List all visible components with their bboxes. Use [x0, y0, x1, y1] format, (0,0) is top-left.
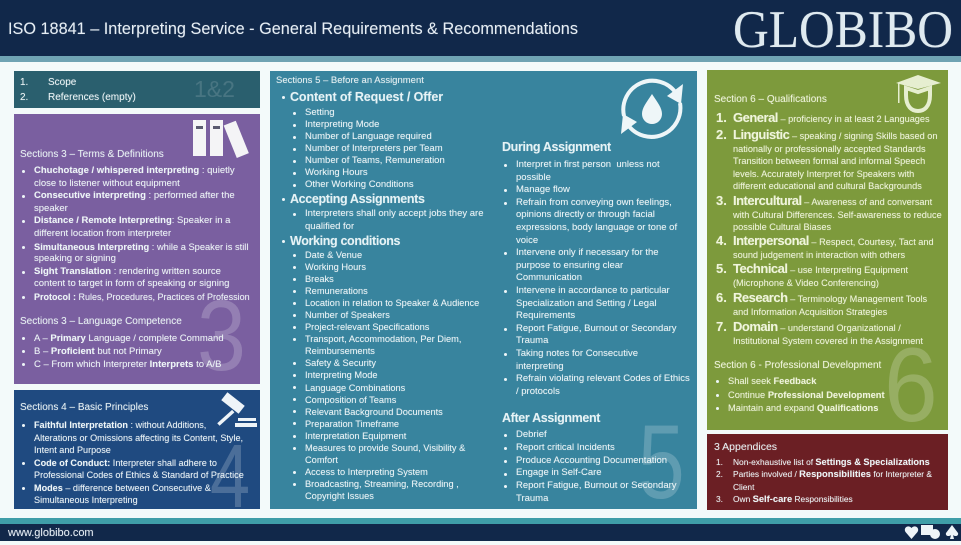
qualifications list: Research – Terminology Management Tools: [733, 290, 927, 305]
during list: interpreting: [516, 360, 564, 372]
appendices list: [716, 457, 932, 504]
panel: appendices: 1.: [716, 457, 723, 467]
panel: appendices: 3.: [716, 494, 723, 504]
during list: Interpret in first person unless not: [516, 159, 660, 170]
language list: [22, 333, 224, 370]
footer bar: [0, 518, 961, 524]
qualifications list: with Cultural Differences. Self-awareness to reduce: [733, 210, 942, 220]
after list: Report Fatigue, Burnout or Secondary: [516, 480, 677, 491]
heading: professional development: Section 6 - Professional Development: [714, 360, 881, 371]
working conditions list: Comfort: [305, 455, 338, 465]
terms list: speaker: [34, 203, 68, 214]
request list: Interpreting Mode: [305, 119, 379, 130]
panel: basic principles: [14, 390, 260, 509]
during list: purpose to ensuring clear: [516, 260, 623, 271]
terms list: Protocol : Rules, Procedures, Practices of Profession: [34, 292, 250, 302]
working conditions list: Project-relevant Specifications: [305, 322, 429, 332]
icon: graduation cap: [896, 75, 941, 113]
principles list: Alterations or Omissions affecting its Content, Style,: [34, 432, 243, 442]
qualifications list: Intercultural – Awareness of and conversant: [733, 193, 932, 208]
heading: basic principles: Sections 4 – Basic Principles: [20, 402, 148, 413]
scope list: 1.: [20, 77, 28, 88]
appendices list: Client: [733, 482, 754, 492]
during list: possible: [516, 172, 551, 183]
during list: voice: [516, 235, 538, 246]
qualifications list: different educational and cultural Backgrounds: [733, 181, 922, 191]
accepting list: qualified for: [305, 220, 354, 232]
after list: Debrief: [516, 429, 547, 440]
working conditions list: Transport, Accommodation, Per Diem,: [305, 334, 461, 344]
icons: heart, speech bubbles, spade: [904, 525, 958, 539]
qualifications list: Transition between formal and informal Speech: [733, 156, 925, 166]
request list: [293, 107, 445, 190]
terms list: Simultaneous Interpreting : while a Speaker is still: [34, 242, 248, 252]
panel: assignment sections: [270, 71, 697, 509]
request list: Number of Interpreters per Team: [305, 143, 443, 154]
development list: Shall seek Feedback: [728, 376, 816, 386]
working conditions list: Reimbursements: [305, 346, 375, 356]
scope list: [20, 77, 136, 103]
panel: qualifications: 4.: [716, 233, 727, 248]
working conditions list: Measures to provide Sound, Visibility &: [305, 443, 465, 453]
after list: Report critical Incidents: [516, 442, 615, 453]
working conditions list: Relevant Background Documents: [305, 407, 443, 417]
working conditions list: Number of Speakers: [305, 310, 390, 320]
subheading: during assignment: During Assignment: [502, 140, 611, 154]
qualifications list: levels. Accurately Interpret for Speakers with: [733, 169, 914, 179]
panel: qualifications: 7.: [716, 319, 727, 334]
appendices list: Non-exhaustive list of Settings & Specializations: [733, 457, 930, 467]
qualifications list: (Microphone & Video Conferencing): [733, 278, 879, 288]
icon: water cycle: [621, 78, 683, 139]
subheading: content of request: Content of Request / Offer: [290, 90, 443, 104]
appendices list: Parties involved / Responsibilities for Interpreter &: [733, 468, 932, 479]
working conditions list: Preparation Timeframe: [305, 419, 399, 429]
qualifications list: possible Cultural Biases: [733, 222, 831, 232]
panel: qualifications: 5.: [716, 261, 727, 276]
during list: Refrain from conveying own feelings,: [516, 197, 672, 208]
principles list: Code of Conduct: Interpreter shall adhere to: [34, 458, 217, 468]
qualifications list: Linguistic – speaking / signing Skills based on: [733, 127, 938, 142]
working conditions list: Access to Interpreting System: [305, 467, 428, 477]
qualifications list: [716, 110, 942, 346]
request list: Working Hours: [305, 167, 368, 178]
qualifications list: Interpersonal – Respect, Courtesy, Tact and: [733, 233, 934, 248]
icon: gavel: [217, 392, 257, 427]
request list: Number of Teams, Remuneration: [305, 155, 445, 166]
panel: scope and references: [14, 71, 260, 108]
subheading: working conditions: Working conditions: [290, 234, 400, 248]
working conditions list: Location in relation to Speaker & Audience: [305, 298, 479, 308]
principles list: Simultaneous Interpreting: [34, 495, 138, 505]
title: ISO 18841 – Interpreting Service - General Requirements & Recommendations: [8, 20, 578, 38]
during list: / protocols: [516, 386, 560, 397]
terms list: different location from interpreter: [34, 228, 171, 239]
panel: scope and references: References (empty): [48, 92, 136, 103]
during list: Report Fatigue, Burnout or Secondary: [516, 323, 677, 334]
development list: Continue Professional Development: [728, 390, 885, 400]
subheading: accepting assignments: Accepting Assignments: [290, 192, 425, 206]
panel: scope and references: Scope: [48, 77, 76, 88]
during list: Manage flow: [516, 184, 570, 195]
language list: B – Proficient but not Primary: [34, 346, 162, 357]
request list: Number of Language required: [305, 131, 432, 142]
language list: A – Primary Language / complete Command: [34, 333, 224, 344]
request list: Setting: [305, 107, 335, 118]
subheading: after assignment: After Assignment: [502, 411, 600, 425]
terms list: Distance / Remote Interpreting: Speaker in a: [34, 215, 230, 226]
scope list: 2.: [20, 92, 28, 103]
principles list: [22, 420, 244, 506]
language list: C – From which Interpreter Interprets to A/B: [34, 359, 221, 370]
during list: [504, 159, 690, 397]
during list: Communication: [516, 272, 582, 283]
during list: Trauma: [516, 335, 548, 346]
terms list: Sight Translation : rendering written source: [34, 266, 221, 277]
during list: opinions directly or through facial: [516, 209, 655, 220]
heading: appendices: 3 Appendices: [714, 441, 777, 453]
panel: appendices: [707, 434, 948, 510]
request list: Other Working Conditions: [305, 179, 414, 190]
terms list: Chuchotage / whispered interpreting : quietly: [34, 165, 235, 176]
working conditions list: Working Hours: [305, 262, 366, 272]
panel: appendices: 2.: [716, 469, 723, 479]
after list: Produce Accounting Documentation: [516, 455, 667, 466]
accepting list: [293, 208, 484, 232]
terms list: speaking or signing: [34, 253, 116, 264]
working conditions list: Date & Venue: [305, 250, 362, 260]
terms list: Consecutive interpreting : performed after the: [34, 190, 235, 201]
principles list: Modes – difference between Consecutive &: [34, 482, 211, 492]
large faint 1&2: 1&2: [194, 76, 235, 102]
qualifications list: and Information Acquisition Strategies: [733, 307, 887, 317]
heading: language competence: Sections 3 – Language Competence: [20, 316, 182, 327]
header bar: [0, 0, 961, 56]
icon: books: [193, 120, 249, 158]
during list: Refrain violating relevant Codes of Ethics: [516, 373, 690, 384]
panel: qualifications: 1.: [716, 110, 727, 125]
qualifications list: nationally or professionally accepted Standards: [733, 144, 926, 154]
qualifications list: sound judgement in interaction with others: [733, 250, 905, 260]
during list: Intervene only if necessary for the: [516, 247, 659, 258]
development list: [716, 376, 885, 414]
during list: expressions, body language or tone of: [516, 222, 677, 233]
terms list: content to target in form of speaking or signing: [34, 278, 229, 289]
working conditions list: Safety & Security: [305, 358, 376, 368]
working conditions list: Composition of Teams: [305, 395, 396, 405]
principles list: Intent and Purpose: [34, 445, 111, 455]
development list: Maintain and expand Qualifications: [728, 403, 878, 413]
after list: Trauma: [516, 493, 548, 504]
principles list: Professional Codes of Ethics & Standard of Practice: [34, 470, 244, 480]
panel: qualifications: 2.: [716, 127, 727, 142]
panel: qualifications: 6.: [716, 290, 727, 305]
after list: Engage in Self-Care: [516, 467, 602, 478]
working conditions list: Breaks: [305, 274, 334, 284]
website: www.globibo.com: [8, 527, 94, 539]
during list: Requirements: [516, 310, 575, 321]
qualifications list: Technical – use Interpreting Equipment: [733, 261, 908, 276]
heading: before an assignment: Sections 5 – Before an Assignment: [276, 75, 424, 86]
qualifications list: General – proficiency in at least 2 Languages: [733, 110, 930, 125]
qualifications list: Institutional System covered in the Assignment: [733, 336, 923, 346]
working conditions list: Interpreting Mode: [305, 370, 378, 380]
working conditions list: Remunerations: [305, 286, 368, 296]
panel: terms and language competence: [14, 114, 260, 384]
accepting list: Interpreters shall only accept jobs they are: [305, 208, 483, 219]
during list: Specialization and Setting / Legal: [516, 298, 656, 309]
panel: qualifications: [707, 70, 948, 430]
working conditions list: Interpretation Equipment: [305, 431, 406, 441]
terms list: close to listener without equipment: [34, 178, 180, 189]
terms list: [22, 165, 250, 302]
during list: Taking notes for Consecutive: [516, 348, 638, 359]
during list: Intervene in accordance to particular: [516, 285, 670, 296]
working conditions list: Language Combinations: [305, 383, 405, 393]
panel: qualifications: 3.: [716, 193, 727, 208]
working conditions list: Copyright Issues: [305, 491, 374, 501]
heading: qualifications: Section 6 – Qualifications: [714, 94, 827, 105]
after list: [504, 429, 677, 504]
principles list: Faithful Interpretation : without Additions,: [34, 420, 206, 430]
working conditions list: [293, 250, 479, 502]
appendices list: Own Self-care Responsibilities: [733, 493, 853, 504]
working conditions list: Broadcasting, Streaming, Recording ,: [305, 479, 459, 489]
qualifications list: Domain – understand Organizational /: [733, 319, 901, 334]
heading: terms and definitions: Sections 3 – Terms & Definitions: [20, 149, 164, 160]
